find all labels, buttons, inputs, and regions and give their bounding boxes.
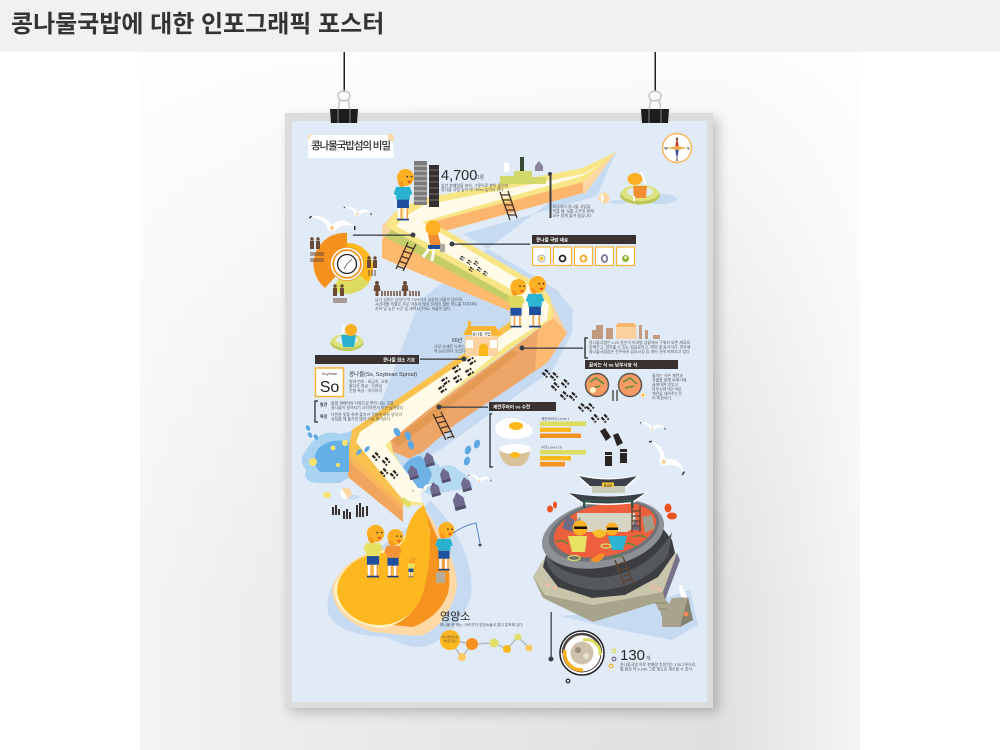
person: blue boy on top bbox=[394, 169, 414, 220]
cooking styles panel: 끓이는 식 vs 남부시장 식 bbox=[589, 362, 637, 368]
bottom donut chart bbox=[560, 631, 604, 675]
gate bbox=[566, 474, 648, 508]
element symbol panel: 콩나물 원소 기호 bbox=[383, 356, 416, 364]
binder clip left bbox=[330, 52, 358, 123]
note under donut: 저녁 및 늦은 시간 및 새벽시간에도 비율이 많다. bbox=[375, 306, 452, 311]
stat 4,700 bbox=[441, 168, 509, 192]
gate: 풍남문 bbox=[604, 482, 612, 487]
egg bar chart: 수란 Level 10 bbox=[541, 444, 562, 450]
element symbol panel: 전형 특성 : 아삭아삭 bbox=[349, 388, 382, 393]
poster shadow bbox=[290, 118, 718, 712]
beach ball right bbox=[598, 192, 626, 204]
60 years note: 가장 유래된 가게는 bbox=[434, 344, 465, 349]
note top right: 모두 함께 즐겨 왔습니다 bbox=[552, 213, 592, 218]
compass: N bbox=[676, 137, 679, 141]
note top right: 먹을 때, 보통 소주와 함께 bbox=[552, 208, 594, 214]
element symbol panel bbox=[315, 355, 419, 396]
region note: 콩나물국밥은 4.25 동은이 이야말 상황에서 구워지 보존 재료로 bbox=[589, 340, 690, 345]
person: yellow girl bbox=[507, 279, 526, 327]
region note: 콩나물국밥집은 전주에서 남부시장 등 여러 곳에 퍼져오고 있다 bbox=[589, 349, 690, 354]
compass: E bbox=[687, 146, 690, 150]
road top surface bbox=[348, 152, 616, 505]
compass bbox=[662, 134, 692, 162]
nutrition heading: 영양소 bbox=[440, 610, 470, 623]
element notes: 성장을 해 줄거의 많아 더욱 좋아진다 bbox=[331, 416, 391, 422]
stat 130 bbox=[620, 647, 696, 672]
cooking styles panel: 끓이는 식은 계란과 bbox=[652, 373, 683, 378]
top arm side face bbox=[430, 180, 583, 233]
ladders bbox=[500, 191, 517, 220]
skyline bbox=[592, 323, 660, 339]
beach ball left bbox=[340, 488, 360, 499]
family on island bbox=[363, 525, 416, 577]
element symbol panel: 원자가 특성 : 가연성 bbox=[349, 384, 382, 388]
gulls upper left bbox=[309, 216, 356, 231]
cooking styles panel: 끓여내며 맛있고, bbox=[652, 382, 679, 387]
stat 130: 월 환산 약 4,000 그릇 정도로 계산할 수 있다 bbox=[620, 666, 692, 672]
left bend side face bbox=[348, 453, 403, 522]
60 years note bbox=[434, 337, 466, 354]
legend dots bbox=[566, 649, 616, 683]
cooking styles panel: 국물을 함께 뚝배기에 bbox=[652, 378, 687, 382]
stat 4,700: 그릇 bbox=[475, 175, 485, 181]
nutrition heading bbox=[440, 610, 523, 627]
stat 4,700: 4,700 bbox=[441, 168, 477, 184]
note under donut: 남녀 성비는 남성이 약 70%이고 남성의 비율이 많으며, bbox=[375, 297, 463, 302]
egg bar chart bbox=[540, 416, 586, 466]
middle arm side face bbox=[382, 228, 512, 312]
60 years note: 약 60년된다 되었다 bbox=[434, 348, 466, 354]
people pictograms bbox=[310, 237, 419, 303]
tall tower and dish stack bbox=[414, 161, 439, 207]
poster heading: 콩나물국밥섬의 비밀 bbox=[311, 140, 391, 152]
left donut chart bbox=[313, 233, 373, 294]
nutrient network bbox=[440, 630, 532, 661]
element notes: 콩나물이 알려지기 시작하면서 저변 넓어졌다 bbox=[331, 405, 404, 410]
blocks with figures bbox=[500, 157, 546, 184]
road shadow bbox=[352, 152, 616, 500]
note under donut bbox=[375, 297, 477, 311]
cooking styles panel bbox=[585, 360, 687, 401]
gull small upper left bbox=[343, 207, 372, 216]
ladders on pot bbox=[615, 506, 640, 588]
restaurant building bbox=[463, 321, 502, 356]
lower arm golden rim bbox=[348, 322, 512, 505]
region note bbox=[585, 338, 691, 358]
eggs panel: 계란후라이 vs 수란 bbox=[493, 404, 531, 410]
steps and rock bbox=[652, 597, 693, 627]
connector lines bbox=[353, 232, 583, 662]
title bar: 콩나물국밥에 대한 인포그래픽 포스터 bbox=[11, 11, 384, 38]
stat 4,700: 콩나물 국밥 높이 약 700m 높이가 된다 bbox=[441, 187, 504, 192]
cooking styles panel: 이 특징이다. bbox=[652, 396, 672, 400]
element notes: 발견 bbox=[320, 401, 328, 407]
soup garnish bbox=[556, 536, 647, 560]
element symbol panel: 콩나물(So, Soybean Sprout) bbox=[349, 370, 417, 378]
element notes: 특징 bbox=[320, 413, 328, 419]
lumps pictogram bars bbox=[332, 503, 368, 519]
stat 130: 130 bbox=[620, 647, 645, 664]
compass: S bbox=[676, 158, 679, 162]
element symbol panel: So bbox=[320, 379, 339, 396]
gull on rock bbox=[679, 585, 687, 598]
left water drops bbox=[305, 424, 415, 456]
cooking styles panel: 남부시장식은 따로 bbox=[652, 386, 682, 392]
title bar bbox=[0, 0, 1000, 52]
right waves bbox=[403, 451, 473, 511]
yellow stick bbox=[401, 497, 412, 508]
poster frame bbox=[285, 113, 713, 708]
nutrient network: 아스파라긴산 bbox=[442, 634, 459, 639]
road island bbox=[348, 152, 616, 522]
person on float right bbox=[620, 172, 677, 204]
road cream centre bbox=[356, 162, 604, 503]
lower arm side face bbox=[390, 318, 567, 460]
red drops bbox=[547, 502, 677, 520]
gulls lower right bbox=[640, 422, 665, 431]
gull small right bbox=[468, 474, 491, 482]
pot island bbox=[533, 553, 698, 640]
cooking styles panel: 계란을 내어주는것 bbox=[652, 391, 682, 396]
ingredients panel: 콩나물 국밥 재료 bbox=[536, 236, 569, 244]
element notes: 다른콩 맛을 쉬게 즐거기 것들에 특유 양식이 bbox=[331, 412, 402, 417]
egg yolk island bbox=[327, 500, 472, 647]
stat 130: 개 bbox=[646, 655, 651, 662]
element notes: 콩을 재배하여 다량으로 뿌리 내는 것을 bbox=[331, 400, 394, 406]
wall background bbox=[140, 52, 860, 750]
gulls on waves bbox=[412, 480, 434, 497]
compass: W bbox=[664, 146, 668, 150]
nutrition heading: 콩나물 한 해는, 여러가지 영양소들이 많이 분포해 있다 bbox=[440, 622, 523, 627]
right drops bbox=[463, 439, 481, 466]
poster heading bbox=[308, 134, 394, 158]
gull large lower right bbox=[642, 439, 690, 476]
note top right bbox=[548, 172, 594, 218]
element symbol panel: 원자 번호 : 비금속, 고체 bbox=[349, 379, 388, 384]
person: sitting orange bbox=[423, 220, 445, 261]
person: blue boy bbox=[526, 276, 546, 327]
mushrooms bbox=[546, 583, 661, 591]
people in soup bbox=[568, 520, 627, 562]
left waves bbox=[302, 431, 352, 498]
element notes bbox=[315, 400, 404, 422]
region note: 인해주고, 전주를 수 있는 밑음료라고, 해장 및 음식이다. 전주에 bbox=[589, 344, 691, 350]
egg bar chart: 계란후라이 Level 1 bbox=[541, 416, 569, 421]
ingredients panel bbox=[532, 235, 636, 266]
stat 4,700: 일년 판매량을 보아, 그릇으로 쌓아 올리면 bbox=[441, 183, 509, 188]
footprints toward pot bbox=[541, 369, 627, 466]
binder clip right bbox=[641, 52, 669, 123]
eggs panel bbox=[489, 402, 556, 467]
stat 130: 콩나물국밥 하루 판매량 추정치는 130그릇으로, bbox=[620, 662, 696, 667]
nutrient network: (아르기닌) bbox=[443, 638, 457, 643]
restaurant building: 콩나물 국밥 bbox=[472, 332, 491, 336]
60 years note: 60년 bbox=[452, 337, 463, 344]
element symbol panel: Soybean bbox=[322, 371, 337, 376]
footprints on road bbox=[371, 256, 488, 479]
note under donut: 시간대별 비율은 주로 아침이 많아 전체의 절반 정도를 차지하며 bbox=[375, 302, 477, 306]
note top right: 지금부터 콩나물 국밥을 bbox=[552, 204, 591, 209]
soup pot bbox=[535, 489, 675, 598]
person on float left bbox=[330, 324, 364, 351]
fishing person bbox=[435, 522, 482, 583]
poster paper bbox=[292, 121, 707, 702]
